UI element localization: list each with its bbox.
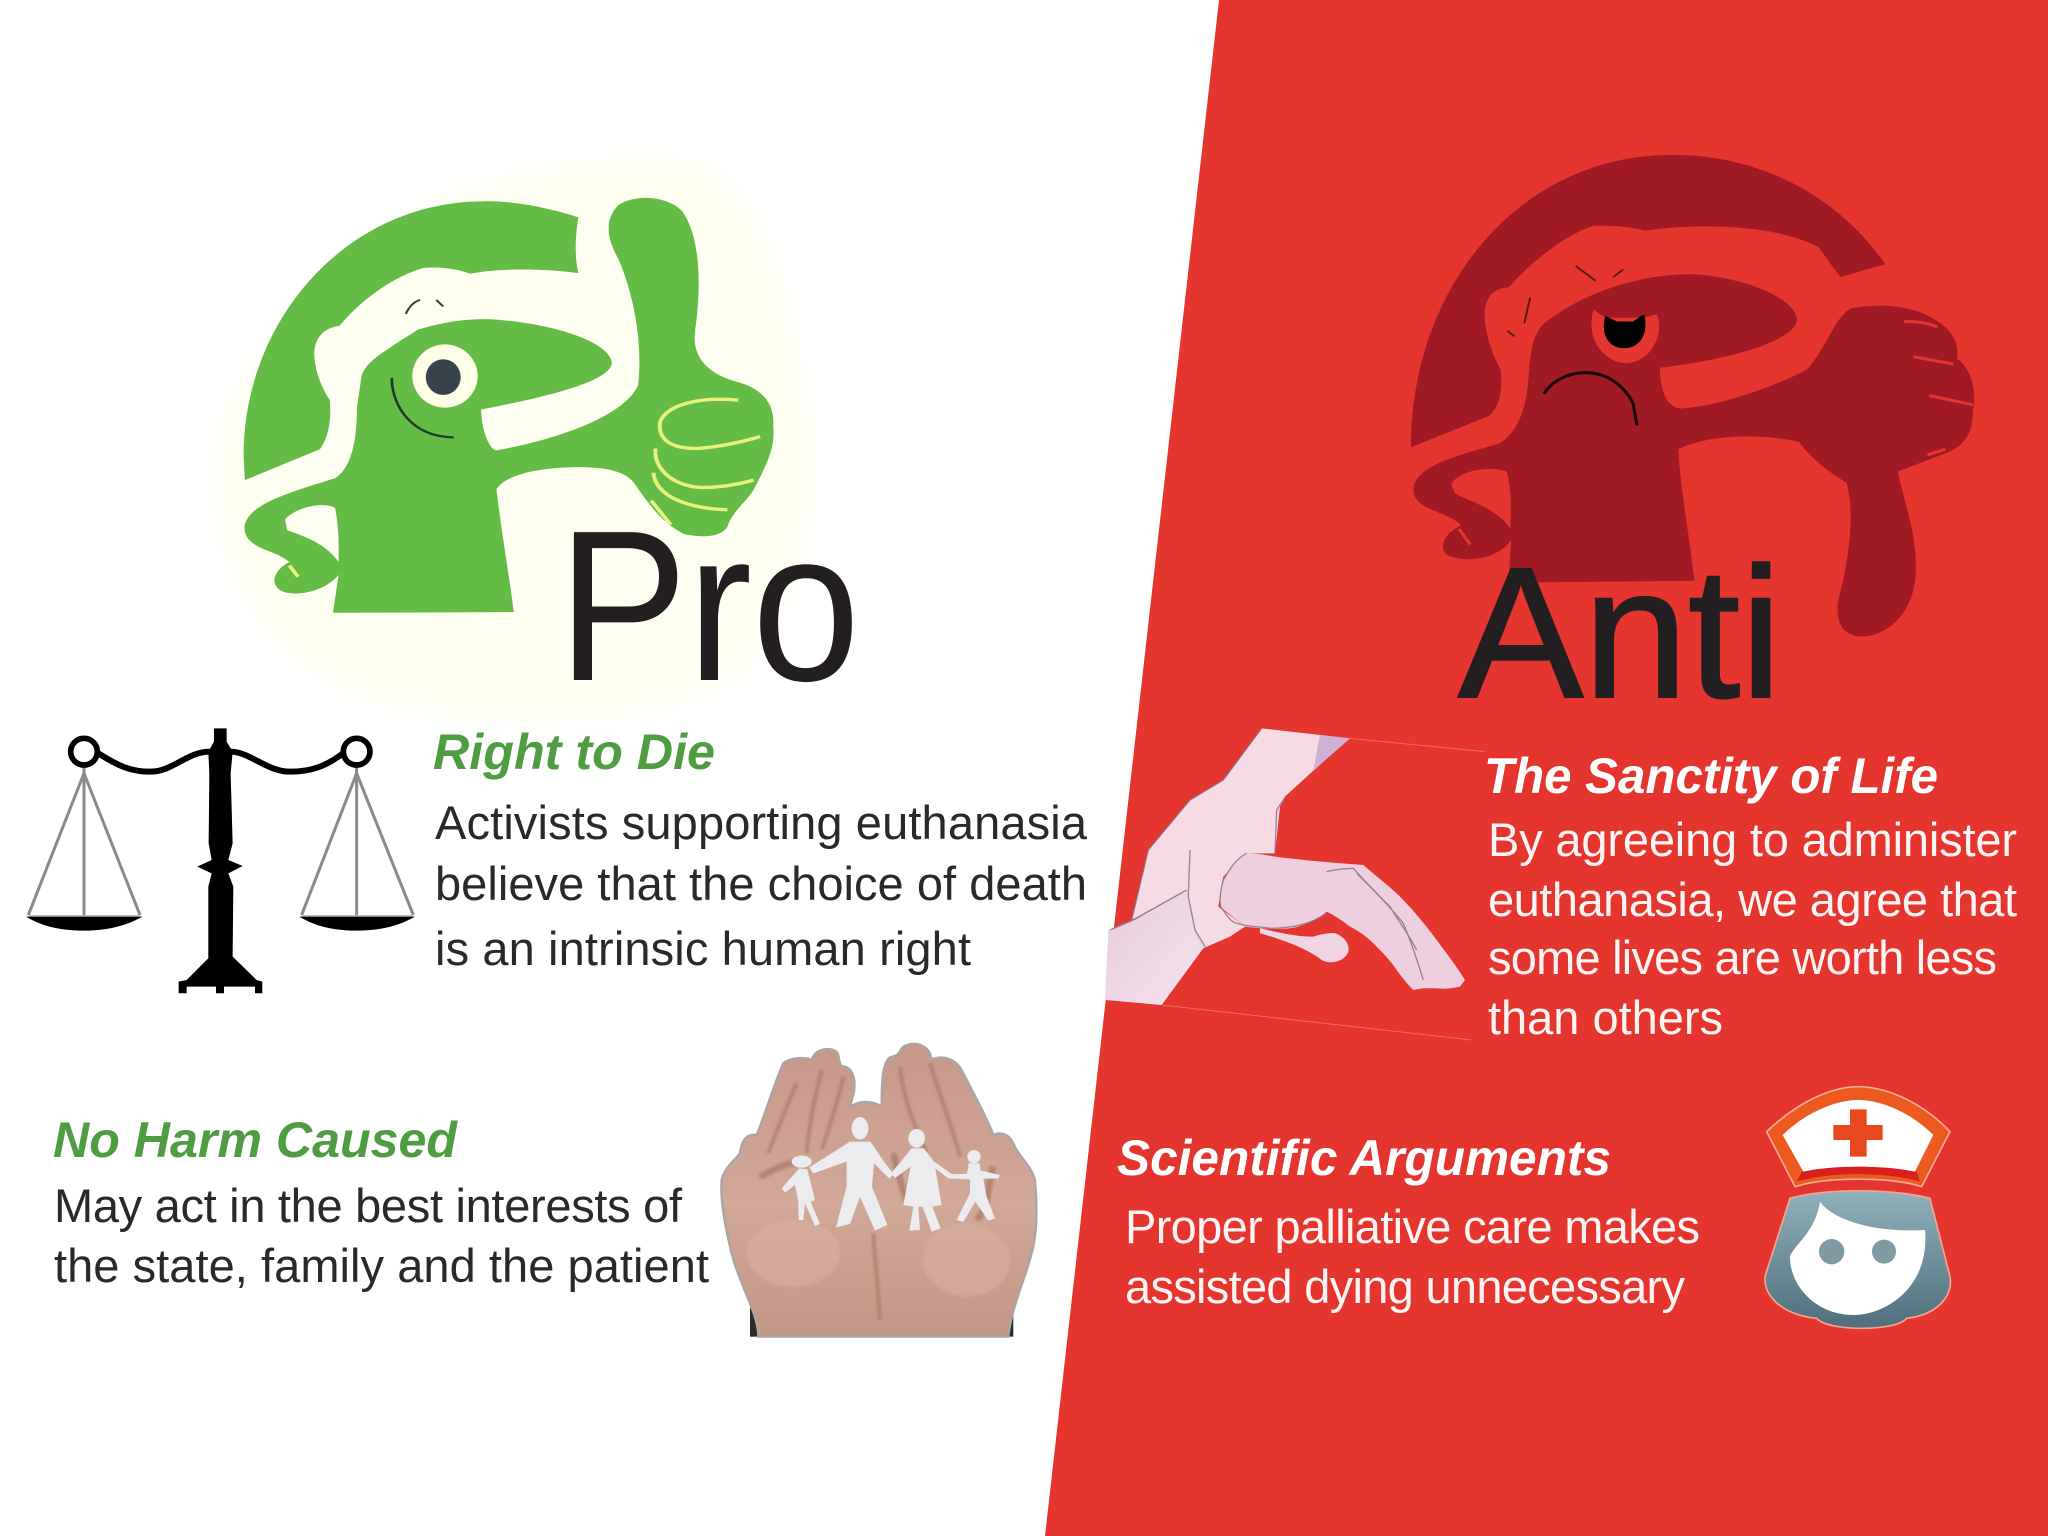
text: no harm caused description [54, 1179, 709, 1292]
text: right to die description [435, 796, 1088, 975]
frown and brows [1544, 373, 1637, 425]
panel: anti red background [1045, 0, 2048, 1536]
palm highlights [747, 1220, 840, 1287]
eye [412, 344, 478, 408]
lower forearm [1105, 890, 1203, 1005]
icon: scales of justice [26, 728, 415, 993]
text: scientific arguments description: Proper palliative care makes [1125, 1200, 1700, 1253]
nurse cap [1767, 1087, 1950, 1187]
heading: Pro: Pro [558, 485, 860, 726]
dark wrist shadows [750, 1307, 1013, 1337]
heading: The Sanctity of Life: The Sanctity of Life [1484, 748, 1938, 804]
boy [967, 1150, 981, 1163]
icon: anti thumbs-down character [1411, 155, 1974, 636]
pans [26, 917, 415, 931]
icon: hand taking pulse on wrist [1105, 728, 1485, 1040]
green arc [244, 201, 578, 480]
text: sanctity of life description: than others [1488, 991, 1723, 1044]
face [1790, 1202, 1925, 1315]
text: no harm caused description: the state, family and the patient [54, 1239, 709, 1292]
paper family [782, 1117, 1000, 1232]
post [179, 728, 262, 993]
dark red arc [1411, 155, 1885, 447]
heading: Anti: Anti [1458, 530, 1782, 737]
eyes [1819, 1239, 1844, 1264]
girl [792, 1156, 812, 1168]
text: right to die description: is an intrinsic human right [435, 922, 971, 975]
patient hand [1220, 853, 1465, 990]
palm shadow [760, 1153, 993, 1220]
text: sanctity of life description: euthanasia, we agree that [1488, 873, 2017, 926]
cross [1833, 1109, 1883, 1157]
dark red body with arm and thumb [1414, 274, 1974, 636]
text: sanctity of life description: some lives are worth less [1488, 931, 1997, 984]
pale halo behind character [216, 162, 812, 718]
text: scientific arguments description: assisted dying unnecessary [1125, 1260, 1686, 1313]
text: right to die description: Activists supporting euthanasia [435, 796, 1088, 849]
faint frame lines [1162, 738, 1485, 1040]
hair [1765, 1191, 1950, 1328]
icon: pro thumbs-up character [216, 162, 812, 718]
hand contour lines [1110, 728, 1423, 980]
cupped hands [721, 1044, 1036, 1337]
beam [98, 752, 345, 772]
man [852, 1117, 868, 1140]
fist finger lines [289, 399, 760, 577]
heading: Right to Die: Right to Die [433, 724, 715, 780]
fist finger lines [1459, 321, 1973, 544]
finger creases [760, 1063, 993, 1320]
upper arm and hand [1132, 728, 1350, 948]
icon: hands holding paper family [721, 1044, 1036, 1337]
text: sanctity of life description [1488, 813, 2017, 1044]
smile and brows [392, 378, 454, 437]
text: no harm caused description: May act in the best interests of [54, 1179, 683, 1232]
text: sanctity of life description: By agreeing to administer [1488, 813, 2017, 866]
patient thumb [1260, 928, 1349, 962]
text: right to die description: believe that the choice of death [435, 857, 1087, 910]
eye ring and pupil [1591, 310, 1659, 363]
text: scientific arguments description [1125, 1200, 1700, 1313]
woman [908, 1129, 925, 1148]
heading: No Harm Caused: No Harm Caused [53, 1112, 458, 1168]
icon: nurse [1765, 1087, 1950, 1328]
chains [28, 767, 413, 917]
heading: Scientific Arguments: Scientific Arguments [1117, 1130, 1611, 1186]
green body with arm and thumb [244, 198, 774, 613]
